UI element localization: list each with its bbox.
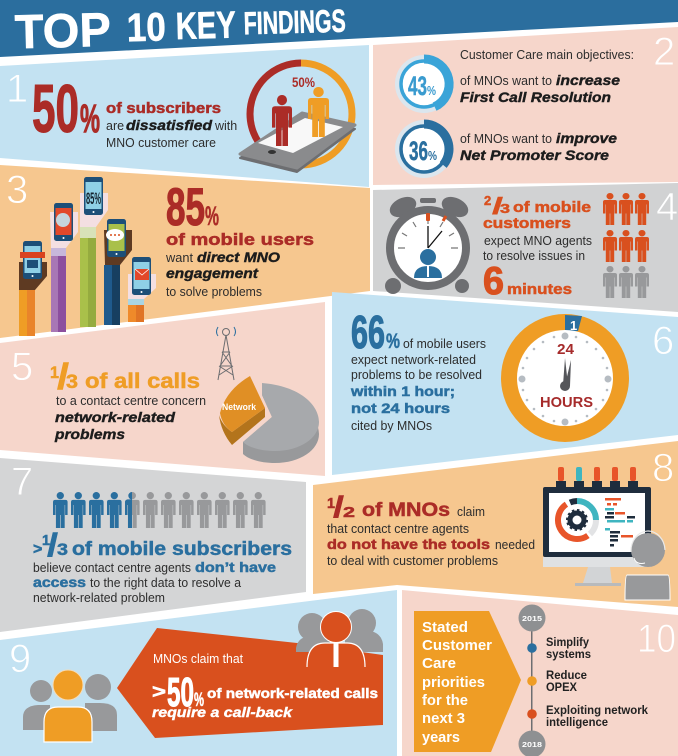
statistic: over 50%: >: [152, 682, 166, 703]
arm and phone 5: [128, 257, 156, 322]
text: network-related problems: to a contact centre concern: [56, 394, 206, 408]
text: 2/3 of mobile customers: expect MNO agents: [484, 234, 592, 248]
icon: 36% ring: 36: [409, 136, 428, 166]
text: direct MNO engagement: to solve problems: [166, 285, 262, 299]
number 3: 3: [6, 168, 28, 212]
icon: 43% ring: 43: [408, 71, 427, 101]
callout: stated priorities arrow: for the: [422, 692, 468, 709]
timeline: 2015: [522, 614, 542, 623]
number 4: 4: [656, 185, 678, 229]
timeline: Simplify: [546, 637, 590, 649]
panel 7: agents lack data access: [0, 458, 306, 632]
text: 1/3 of mobile subscribers: >: [33, 541, 42, 558]
chart: pie with network slice: Network: [222, 402, 257, 413]
text: of subscribers: MNO customer care: [106, 136, 216, 150]
text: 1/3 of all calls: /: [57, 356, 69, 397]
statistic 66%: %: [386, 330, 400, 353]
text: 1/3 of mobile subscribers: 3: [57, 540, 68, 559]
text: half of MNOs claim: 2: [343, 504, 355, 521]
number 1: 1: [6, 67, 28, 111]
panel 3: mobile users engagement: [0, 165, 370, 338]
statistic: over 50%: [152, 669, 204, 715]
text: direct MNO engagement: want: [165, 251, 194, 265]
text: 2/3 of mobile customers: to resolve issues in: [483, 249, 585, 263]
text: net promoter score: improve: [556, 130, 617, 146]
text: network-related calls: [152, 685, 378, 720]
text: first call resolution: of MNOs want to: [460, 74, 552, 88]
text: direct MNO engagement: engagement: [166, 265, 259, 281]
title: FINDINGS: [243, 3, 346, 41]
illustration: hands holding phones: [19, 177, 156, 336]
callout: stated priorities arrow: next 3: [422, 710, 465, 727]
icon: people grid: [603, 193, 649, 298]
callout: stated priorities arrow: Care: [422, 655, 456, 672]
statistic: over 50%: %: [194, 690, 204, 711]
text: don't have access: to the right data to resolve a: [90, 576, 241, 590]
text: don't have access: [33, 559, 276, 605]
text: first call resolution: First Call Resolution: [460, 89, 611, 105]
text: 1/3 of all calls: [50, 356, 200, 397]
icon: orange person group: [23, 670, 117, 742]
statistic 85%: 85: [166, 178, 205, 237]
callout: stated priorities arrow: years: [422, 729, 460, 746]
text: net promoter score: Net Promoter Score: [460, 147, 609, 163]
text: first call resolution: increase: [556, 72, 620, 88]
icon: 24 hours clock: [501, 314, 629, 442]
text: network-related problems: network-related: [55, 409, 176, 425]
number 6: 6: [652, 319, 674, 363]
text: don't have access: network-related problem: [33, 591, 165, 605]
text: half of MNOs claim: of MNOs: [362, 500, 450, 521]
statistic 85%: %: [205, 201, 219, 231]
timeline: [518, 604, 649, 756]
text: direct MNO engagement: direct MNO: [197, 249, 280, 265]
arm and phone 3: 85%: [86, 189, 101, 208]
text: of subscribers: [106, 100, 237, 150]
icon: ring with phone and people: [240, 63, 355, 172]
text: 1/3 of all calls: 3: [66, 372, 78, 393]
timeline: OPEX: [546, 682, 577, 694]
icon: 24 hours clock: 1: [570, 318, 577, 333]
text: 1/3 of mobile subscribers: 1: [42, 532, 50, 549]
icon: monitor with agent: [543, 467, 670, 600]
text: half of MNOs claim: claim: [457, 505, 485, 519]
text: network-related problems: problems: [54, 426, 125, 442]
panel 8: agents lack tools: [313, 441, 678, 607]
icon: 24 hours clock: 24: [557, 341, 575, 358]
number 2: 2: [653, 30, 675, 74]
panel 1: dissatisfied subscribers: [0, 45, 369, 187]
text: MNOs claim: MNOs claim that: [153, 652, 243, 666]
timeline: Exploiting network: [546, 705, 649, 717]
text: half of MNOs claim: [327, 491, 535, 568]
panel 10: priorities: [402, 590, 678, 756]
text: half of MNOs claim: do not have the tools: [327, 536, 490, 552]
text: 2/3 of mobile customers: 3: [500, 201, 510, 216]
text: half of MNOs claim: 1: [327, 495, 335, 512]
arm and phone 4: [104, 219, 132, 325]
text: network-related problems resolved: [350, 337, 486, 433]
text: network-related problems resolved: problems to be resolved: [351, 368, 482, 382]
panel 4: six minute resolution: [373, 183, 678, 312]
text: direct MNO engagement: [165, 230, 314, 299]
icon: 36% ring: %: [428, 148, 437, 163]
text: 1/3 of all calls: of all calls: [85, 370, 200, 393]
callout: stated priorities arrow: priorities: [422, 674, 485, 691]
text: network-related problems resolved: within 1 hour;: [350, 383, 455, 399]
text: 2/3 of mobile customers: customers: [483, 215, 571, 232]
text: network-related calls: of network-related calls: [207, 685, 378, 701]
number 8: 8: [652, 446, 674, 490]
icon: 43% ring: %: [427, 83, 436, 98]
text: network-related calls: require a call-back: [152, 705, 294, 720]
text: objectives heading: Customer Care main objectives:: [460, 48, 634, 62]
number 9: 9: [9, 637, 31, 681]
text: network-related problems resolved: of mobile users: [403, 337, 486, 351]
statistic 66%: 66: [351, 306, 385, 358]
text: half of MNOs claim: that contact centre agents: [327, 522, 469, 536]
text: 2/3 of mobile customers: of mobile: [513, 199, 591, 216]
timeline: systems: [546, 649, 591, 661]
icon: 36% ring: [395, 120, 453, 178]
panel 2: customer care objectives: [373, 27, 678, 185]
callout: arrow banner: [117, 628, 383, 738]
number 7: 7: [11, 460, 33, 504]
text: half of MNOs claim: needed: [495, 538, 535, 552]
callout: stated priorities arrow: Stated: [422, 619, 468, 636]
chart: pie with network slice: [219, 376, 319, 463]
statistic: over 50%: 50: [167, 669, 194, 715]
text: network-related problems resolved: cited by MNOs: [351, 419, 432, 433]
panel 6: within one hour: [332, 292, 678, 475]
text: 1/3 of all calls: 1: [50, 363, 59, 382]
text: of subscribers: of subscribers: [106, 100, 221, 117]
timeline: intelligence: [546, 717, 608, 729]
title: [14, 0, 346, 59]
icon: network tower: [216, 327, 236, 380]
arm and phone 3: [80, 177, 108, 327]
title: 10: [126, 5, 166, 50]
icon: alarm clock: [385, 193, 471, 294]
text: network-related problems: [54, 394, 206, 442]
text: half of MNOs claim: /: [333, 491, 345, 524]
text: first call resolution: [460, 72, 620, 105]
arm and phone 2: [50, 203, 78, 332]
text: 2/3 of mobile customers: minutes: [507, 281, 572, 298]
text: don't have access: access: [33, 574, 86, 590]
icon: ring with phone and people: 50%: [292, 74, 315, 90]
text: net promoter score: of MNOs want to: [460, 132, 552, 146]
text: 2/3 of mobile customers: /: [492, 193, 504, 219]
title: KEY: [175, 5, 236, 48]
timeline: 2018: [522, 740, 542, 749]
text: don't have access: believe contact centre agents: [33, 561, 191, 575]
callout: stated priorities arrow: Customer: [422, 637, 492, 654]
text: net promoter score: [460, 130, 617, 163]
text: half of MNOs claim: to deal with customer problems: [327, 554, 498, 568]
callout: stated priorities arrow: [414, 611, 521, 752]
arm and phone 1: [19, 241, 47, 336]
statistic 50%: %: [80, 97, 100, 141]
header banner: [0, 0, 678, 59]
text: network-related problems resolved: not 24 hours: [351, 400, 450, 416]
icon: row of people: [53, 492, 266, 528]
title: TOP: [14, 4, 112, 59]
text: 2/3 of mobile customers: 2: [484, 193, 491, 208]
timeline: Reduce: [546, 670, 587, 682]
icon: 43% ring: [395, 55, 453, 113]
text: 1/3 of mobile subscribers: [33, 527, 292, 563]
panel 9: call-backs: [0, 590, 397, 756]
number 5: 5: [11, 345, 33, 389]
text: 2/3 of mobile customers: [483, 193, 592, 303]
text: network-related problems resolved: expect network-related: [351, 353, 476, 367]
text: don't have access: don’t have: [195, 559, 276, 575]
text: direct MNO engagement: of mobile users: [166, 230, 314, 249]
text: 2/3 of mobile customers: 6: [483, 260, 504, 303]
text: 1/3 of mobile subscribers: /: [47, 527, 58, 563]
text: of subscribers: are: [106, 119, 124, 133]
text: 1/3 of mobile subscribers: of mobile subscribers: [72, 539, 292, 560]
panel 5: network-related calls: [0, 302, 325, 476]
statistic 50%: 50: [32, 71, 79, 147]
text: of subscribers: dissatisfied: [126, 118, 213, 133]
icon: 24 hours clock: HOURS: [540, 394, 593, 411]
icon: red person group: [296, 609, 383, 667]
text: of subscribers: with: [214, 119, 237, 133]
